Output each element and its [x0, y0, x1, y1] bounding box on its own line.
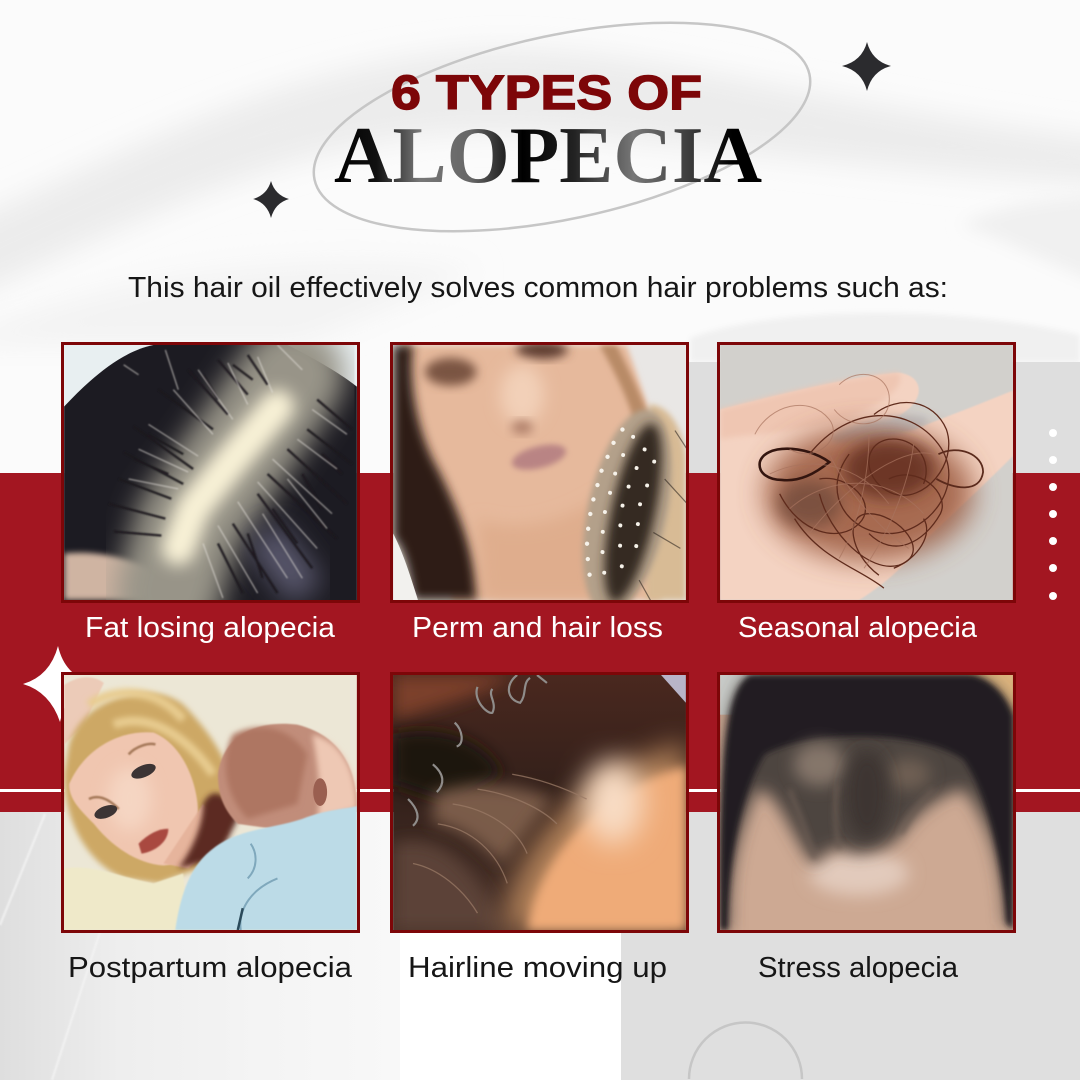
- title: ALOPECIA: [334, 112, 762, 200]
- title: 6 TYPES OF: [391, 67, 702, 120]
- label: fat losing alopecia: Fat losing alopecia: [85, 612, 336, 644]
- panel: hairline moving up photo: [392, 674, 688, 932]
- label: perm and hair loss: Perm and hair loss: [412, 612, 663, 644]
- decorative circle bottom: [689, 1022, 802, 1079]
- panel: perm and hair loss photo: [392, 341, 707, 626]
- title: [334, 67, 762, 200]
- panel: stress alopecia photo: [718, 674, 1014, 932]
- red band: [0, 473, 1080, 812]
- panel: seasonal alopecia photo: [718, 344, 1014, 602]
- label: hairline moving up: Hairline moving up: [408, 952, 667, 984]
- subtitle: This hair oil effectively solves common hair problems such as:: [128, 272, 948, 304]
- icon: dark sparkle left: [253, 181, 289, 218]
- decorative ellipse: [295, 0, 829, 270]
- label: postpartum alopecia: Postpartum alopecia: [68, 952, 353, 984]
- dots column: [1049, 429, 1057, 600]
- label: stress alopecia: Stress alopecia: [758, 952, 959, 984]
- panel: fat losing alopecia photo: [62, 344, 358, 602]
- label: seasonal alopecia: Seasonal alopecia: [738, 612, 978, 644]
- icon: dark sparkle top right: [842, 42, 891, 91]
- icon: white sparkle: [23, 646, 92, 722]
- panel: postpartum alopecia photo: [62, 674, 358, 932]
